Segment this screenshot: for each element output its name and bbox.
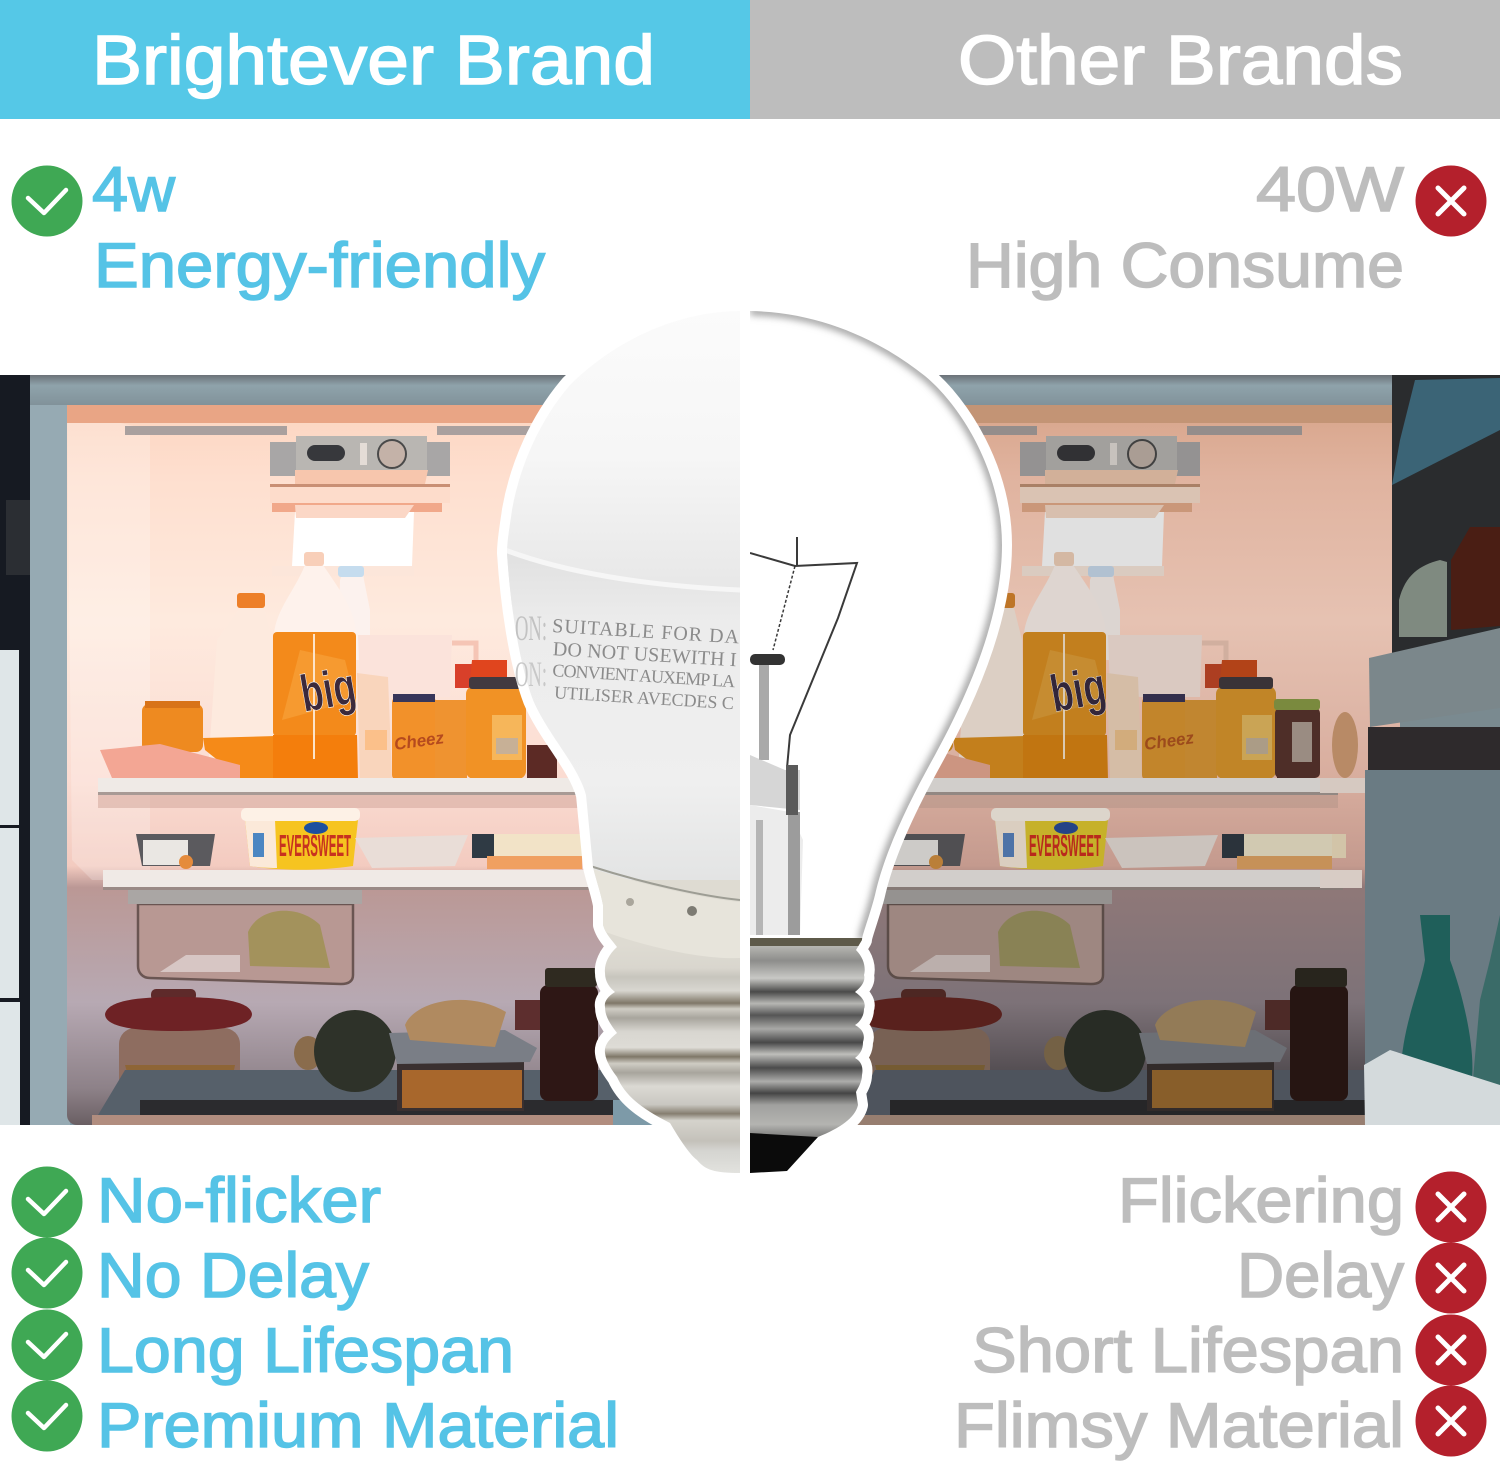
photo: fridge dim light (right): big [1046,657,1110,724]
header: Brightever Brand: Brightever Brand [92,21,655,99]
icon: incandescent bulb (right half) [750,305,1020,1175]
icon: green check [12,1166,82,1238]
list: Brightever benefits [12,1166,619,1461]
icon: LED bulb (left half): ON: [515,654,547,694]
list: other brand drawbacks: Short Lifespan [972,1316,1404,1386]
header: Brightever Brand [0,0,750,119]
header: Other Brands: Other Brands [958,21,1403,99]
icon: LED bulb (left half) [497,375,740,1173]
icon: green check [12,1310,82,1380]
icon: LED bulb (left half): SUITABLE FOR DA [552,615,740,648]
photo: fridge dim light (right): Cheez [1143,728,1196,754]
panel: top right wattage claim [966,155,1486,301]
photo: fridge dim light (right) [800,375,1500,1125]
icon: LED bulb (left half): ON: [515,608,547,648]
list: Brightever benefits: Premium Material [97,1391,619,1461]
list: other brand drawbacks [954,1166,1486,1461]
list: Brightever benefits: Long Lifespan [97,1316,514,1386]
photo: fridge dim light (right): EVERSWEET [1029,828,1101,863]
panel: top left wattage claim: Energy-friendly [94,231,546,301]
panel: top right wattage claim: 40W [1256,155,1405,225]
icon: LED bulb (left half): DO NOT USEWITH I [552,638,737,671]
panel: top left wattage claim: 4w [92,155,176,225]
photo: fridge warm light (left): Cheez [393,728,446,754]
icon: red cross [1416,1172,1486,1242]
icon: red cross [1416,1386,1486,1456]
icon: red cross [1416,1314,1486,1386]
list: other brand drawbacks: Flimsy Material [954,1391,1404,1461]
list: Brightever benefits: No Delay [97,1241,370,1311]
list: other brand drawbacks: Delay [1237,1241,1405,1311]
icon: green check [12,1238,82,1308]
filament support wires [750,537,857,768]
panel: top right wattage claim: High Consume [966,231,1404,301]
icon: green check [12,166,82,236]
glass stem [750,654,785,665]
icon: LED bulb (left half): UTILISER AVECDES C [554,682,734,713]
photo: fridge warm light (left): EVERSWEET [279,828,351,863]
photo: fridge warm light (left): big [296,657,360,724]
icon: LED bulb (left half): CONVIENT AUXEMP LA [552,660,736,691]
header: Other Brands [750,0,1500,119]
icon: red cross [1416,166,1486,236]
photo: fridge warm light (left) [0,375,750,1125]
panel: top left wattage claim [12,155,546,301]
list: other brand drawbacks: Flickering [1118,1166,1404,1236]
icon: red cross [1416,1242,1486,1314]
list: Brightever benefits: No-flicker [97,1166,381,1236]
icon: green check [12,1380,82,1452]
